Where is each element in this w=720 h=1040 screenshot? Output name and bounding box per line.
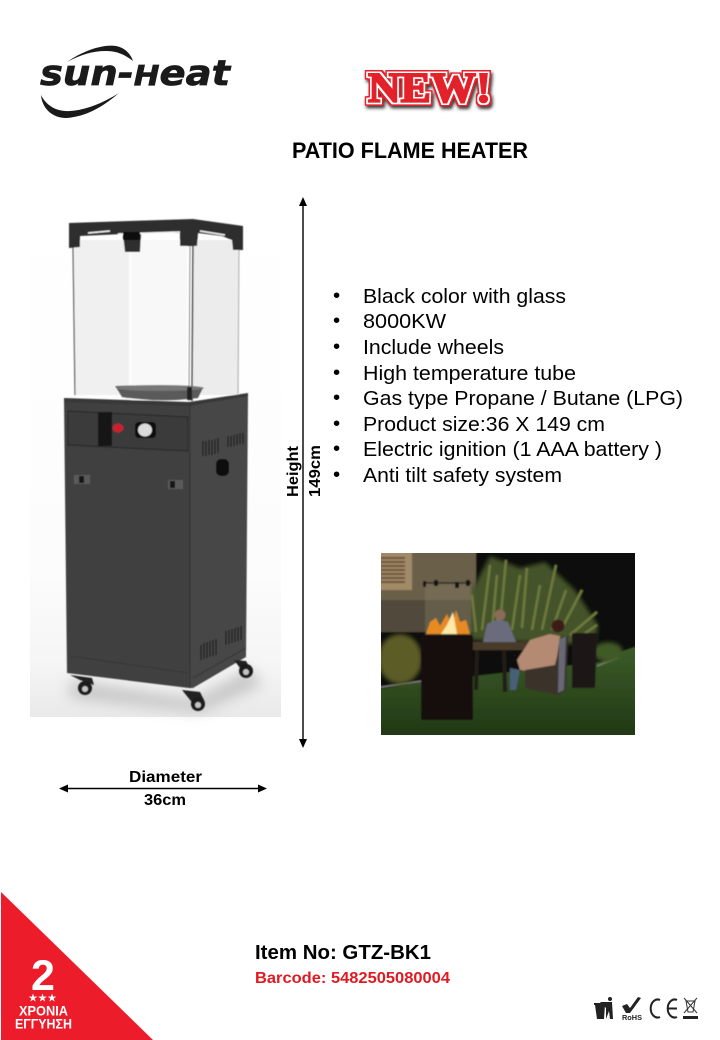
feature: safety: Anti tilt safety system xyxy=(363,464,562,487)
height label xyxy=(285,445,324,497)
feature: wheels: Include wheels xyxy=(363,336,504,359)
height label: Height xyxy=(285,445,302,497)
wheels xyxy=(70,660,253,711)
diameter arrow xyxy=(59,784,267,792)
badge: NEW!: NEW! xyxy=(368,66,491,112)
floor shadow xyxy=(70,668,262,712)
feature list xyxy=(333,284,683,487)
compliance icons xyxy=(594,997,698,1022)
feature: power xyxy=(333,309,447,333)
logo: sun-heat: sun- Heat xyxy=(40,54,231,94)
glass panels xyxy=(73,240,239,401)
upper vents xyxy=(203,433,243,456)
lifestyle photo xyxy=(381,553,635,735)
feature: size: Product size:36 X 149 cm xyxy=(363,413,605,436)
feature: ignition: • xyxy=(333,437,340,460)
feature: gas: • xyxy=(333,386,340,409)
height label: 149cm xyxy=(307,445,324,497)
feature: gas: Gas type Propane / Butane (LPG) xyxy=(363,387,683,410)
heater in photo xyxy=(421,580,473,720)
diameter label: Diameter xyxy=(129,769,202,786)
cabinet xyxy=(64,393,248,688)
icon: recycling bin and figure xyxy=(594,997,613,1019)
feature: colour: • xyxy=(333,284,340,307)
barcode: Barcode: 5482505080004 xyxy=(255,970,450,987)
feature: wheels: • xyxy=(333,335,340,358)
warranty badge: 2 xyxy=(31,952,55,1000)
side handle hole xyxy=(216,459,229,476)
lower vents xyxy=(201,626,241,660)
lawn xyxy=(381,646,635,735)
icon: CE mark xyxy=(651,1000,677,1017)
product image: patio heater xyxy=(30,200,281,717)
feature: size: • xyxy=(333,412,340,435)
feature: power: 8000KW xyxy=(363,310,447,333)
burner bowl xyxy=(115,385,204,400)
garden path edge xyxy=(375,658,618,688)
item number: Item No: GTZ-BK1 xyxy=(255,942,431,964)
feature: ignition: Electric ignition (1 AAA battery ) xyxy=(363,438,662,461)
feature: colour: Black color with glass xyxy=(363,285,566,308)
chairs xyxy=(525,633,597,695)
height arrow xyxy=(299,197,307,748)
wall xyxy=(381,553,478,601)
warranty badge: ΕΓΓΥΗΣΗ xyxy=(15,1016,72,1032)
icon: crossed-out bin xyxy=(683,998,698,1019)
warranty badge xyxy=(1,892,153,1040)
feature: tube: • xyxy=(333,361,340,384)
title: PATIO FLAME HEATER xyxy=(292,138,528,163)
warranty badge: ★★★ xyxy=(29,993,57,1004)
door brackets xyxy=(74,475,183,489)
shrubs xyxy=(378,634,422,684)
feature: safety: • xyxy=(333,463,340,486)
image background xyxy=(30,200,281,717)
warranty badge: ΧΡΟΝΙΑ xyxy=(19,1002,68,1018)
diameter value: 36cm xyxy=(144,792,186,809)
woman in blanket xyxy=(510,620,564,690)
feature: tube: High temperature tube xyxy=(363,362,576,385)
feature: power: • xyxy=(333,309,340,332)
top frame xyxy=(69,219,243,252)
window xyxy=(381,553,413,591)
icon: RoHS check: RoHS xyxy=(622,1015,642,1022)
logo: sun-heat xyxy=(40,46,231,118)
grass plant xyxy=(470,556,598,645)
table and man xyxy=(472,608,528,692)
control panel xyxy=(68,411,188,451)
